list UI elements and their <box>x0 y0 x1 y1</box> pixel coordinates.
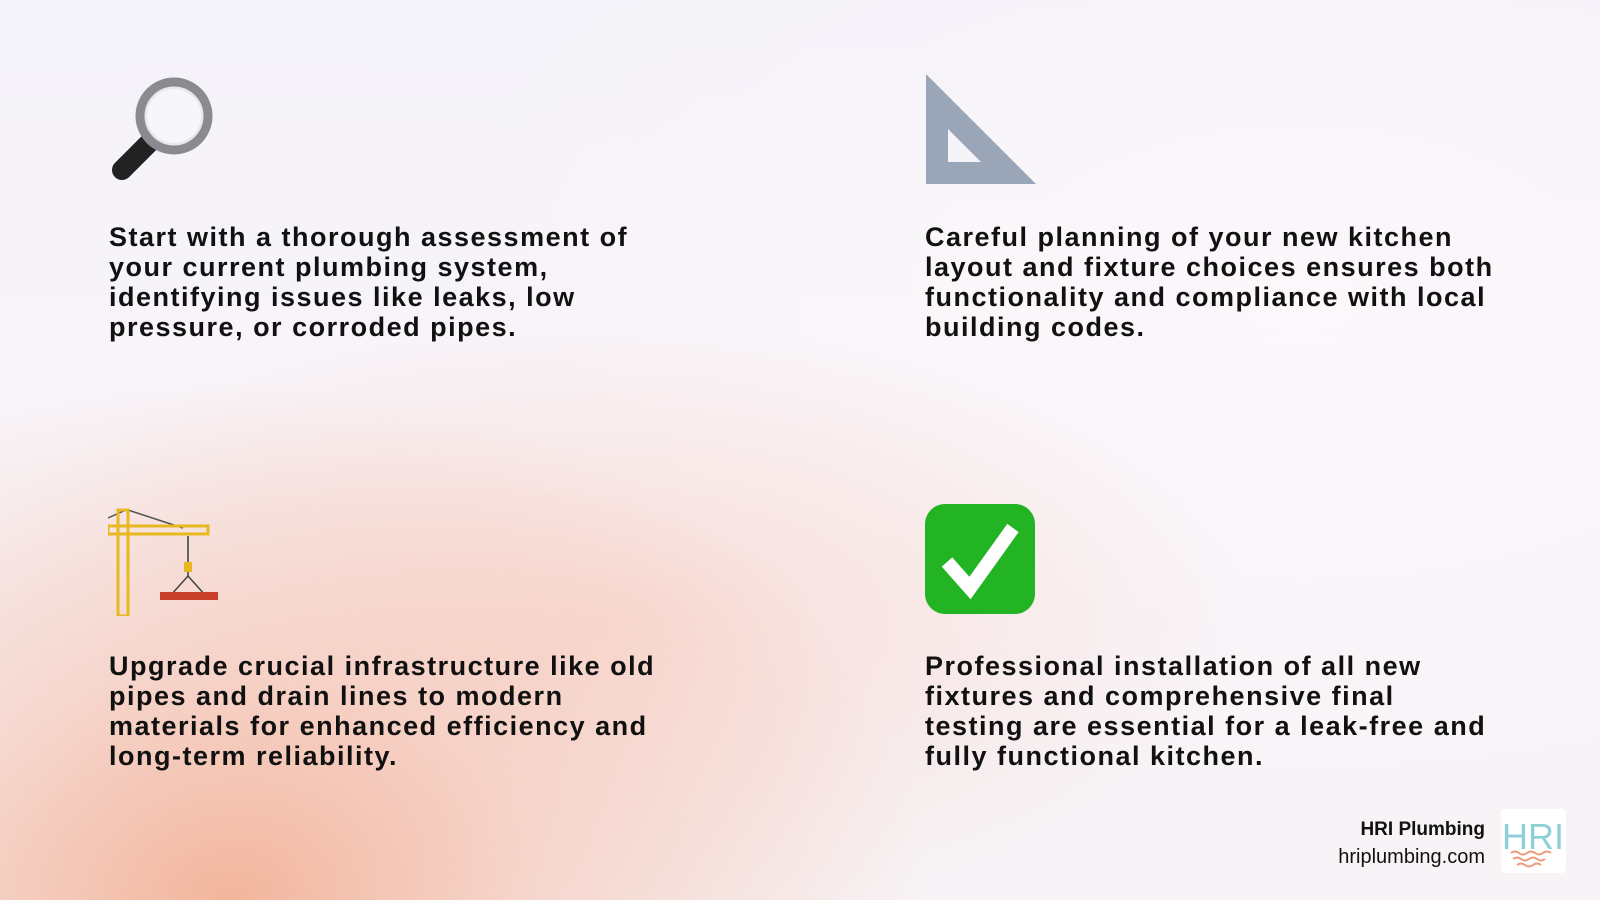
text: assessment: Start with a thorough assessment of <box>109 222 628 252</box>
text: upgrade: materials for enhanced efficiency and <box>109 711 648 741</box>
footer brand: hriplumbing.com <box>1338 846 1485 868</box>
text: installation: fully functional kitchen. <box>925 741 1264 771</box>
text: upgrade <box>109 651 655 771</box>
footer brand: HRI Plumbing <box>1360 819 1485 840</box>
text: planning: functionality and compliance with local <box>925 282 1486 312</box>
icon: triangle ruler <box>926 74 1036 184</box>
text: planning <box>925 222 1494 342</box>
text: upgrade: Upgrade crucial infrastructure like old <box>109 651 655 681</box>
text: installation: fixtures and comprehensive final <box>925 681 1395 711</box>
text: planning: layout and fixture choices ensures both <box>925 252 1494 282</box>
text: assessment <box>109 222 628 342</box>
text: upgrade: long-term reliability. <box>109 741 398 771</box>
text: planning: building codes. <box>925 312 1146 342</box>
footer brand <box>1338 819 1485 868</box>
logo: HRI <box>1502 816 1564 857</box>
text: upgrade: pipes and drain lines to modern <box>109 681 564 711</box>
logo <box>1501 809 1566 873</box>
text: installation: Professional installation of all new <box>925 651 1422 681</box>
text: installation <box>925 651 1486 771</box>
icon: check mark <box>925 504 1035 614</box>
text: assessment: your current plumbing system, <box>109 252 549 282</box>
icon: crane <box>108 508 218 616</box>
text: planning: Careful planning of your new kitchen <box>925 222 1453 252</box>
text: assessment: identifying issues like leaks, low <box>109 282 576 312</box>
icon: magnifying glass <box>112 78 212 180</box>
text: installation: testing are essential for a leak-free and <box>925 711 1486 741</box>
text: assessment: pressure, or corroded pipes. <box>109 312 517 342</box>
